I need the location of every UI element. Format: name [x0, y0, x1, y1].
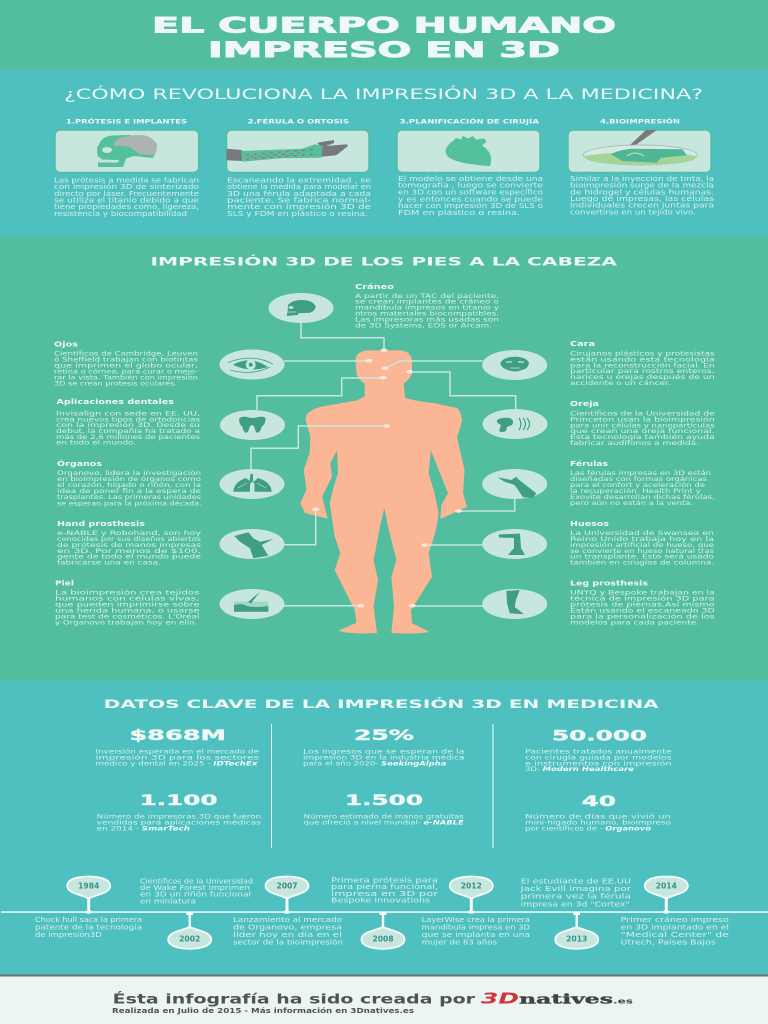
panel: body map	[54, 254, 715, 633]
text: Ojos: rar la vista. También con impresión	[54, 374, 198, 382]
text block: Las prótesis a medida se fabrican	[54, 176, 199, 184]
text: Piel: una herida humana, o usarse	[55, 608, 200, 615]
icon: heart	[446, 136, 491, 166]
timeline text: 2008 prosthesis	[331, 877, 438, 905]
text: Ojos: que imprimen el globo ocular,	[54, 363, 198, 370]
stat: 25%: impresión 3D en la industria médica	[303, 753, 465, 761]
text: Ojos: Ojos	[54, 340, 78, 349]
text: Cráneo: Cráneo	[355, 282, 394, 291]
timeline text: 2007 Organovo: de Organovo, empresa	[233, 924, 342, 932]
text block: mente con impresión 3D de	[227, 203, 371, 211]
card	[55, 130, 199, 172]
background: header band	[0, 0, 768, 70]
stat: 1.100: en 2014 - SmarTech	[97, 825, 191, 832]
logo: 3Dnatives: 3D	[481, 990, 519, 1008]
text: Hand prosthesis: fabricarse una en casa.	[57, 560, 161, 567]
timeline text: 2013 Cortex: primera vez la férula	[521, 892, 631, 900]
text block: bioimpresión surge de la mezcla	[570, 182, 714, 190]
connector: splint	[455, 499, 515, 513]
icon: splint	[482, 469, 547, 499]
timeline text: 2002 Wake Forest: de Wake Forest imprimen	[140, 884, 250, 892]
background: key data panel	[0, 681, 768, 975]
stat: 40: por científicos de - Organovo	[525, 824, 652, 832]
text: Huesos: Huesos	[570, 519, 609, 528]
text: Cara: Cara	[570, 339, 595, 348]
text: Oreja: Científicos de la Universidad de	[570, 409, 715, 417]
text: Leg prosthesis: UNYQ y Bespoke trabajan en la	[570, 590, 715, 597]
text block: SLS y FDM en plástico o resina.	[227, 210, 368, 218]
text: Aplicaciones dentales: más de 2,6 millones de pacientes	[56, 433, 200, 441]
text: Huesos: se convierte en hueso natural tras	[570, 548, 714, 555]
timeline text: 2007 Organovo: líder hoy en día en el	[233, 931, 342, 939]
text: Oreja: fabricar audífonos a medida.	[570, 439, 699, 447]
text: Férulas: Las férulas impresas en 3D están	[570, 469, 711, 477]
text block: paciente. Se fabrica normal-	[227, 196, 372, 204]
panel: key data	[1, 696, 768, 949]
text block: resistencia y biocompatibilidad	[54, 210, 187, 218]
text: Aplicaciones dentales: en todo el mundo.	[56, 440, 136, 447]
text: Leg prosthesis: prótesis de piernas.Así mismo	[570, 601, 715, 609]
text block: convertirse en un tejido vivo.	[570, 208, 696, 216]
pin: 2013	[555, 912, 598, 949]
logo: 3Dnatives: natives	[519, 992, 613, 1008]
stat: 1.500: que ofreció a nivel mundial- e-NABLE	[304, 818, 465, 826]
card	[226, 130, 369, 172]
pin: 2012	[450, 876, 493, 914]
background: revolution panel	[0, 70, 768, 237]
text: Oreja: Oreja	[570, 399, 599, 408]
text: Leg prosthesis	[570, 579, 715, 626]
pin: 2013: 2013	[566, 935, 587, 944]
human body silhouette	[301, 351, 467, 633]
timeline text: 2007 Organovo: sector de la bioimpresión	[233, 938, 343, 946]
text: Leg prosthesis: modelos para cada paciente.	[570, 619, 699, 626]
text: Cara: están usando ésta tecnología	[570, 355, 715, 363]
text: Ojos: 3D se crean protesis oculares.	[54, 381, 177, 388]
column heading: 1.PRÓTESIS E IMPLANTES	[66, 116, 188, 126]
timeline text: 2002 Wake Forest	[140, 877, 253, 905]
text: Aplicaciones dentales: debut, la compañía ha tratado a	[56, 427, 200, 435]
timeline text: 2002 Wake Forest: Científicos de la Universidad	[140, 877, 253, 885]
stat: 40: mini-hígado humano, bioimpreso	[525, 818, 671, 826]
text: Cráneo	[355, 282, 499, 329]
text block: Luego de impresas, las células	[570, 195, 714, 203]
stat: 40: Número de días que vivió un	[525, 813, 671, 821]
text: Oreja: Princeton usan la bioimpresión	[570, 415, 715, 423]
stat: 50.000	[525, 729, 672, 773]
text: Aplicaciones dentales: con la impresión 3D. Desde su	[56, 421, 200, 429]
text: Huesos	[570, 519, 714, 567]
text: Hand prosthesis: conocidas por sus diseños abiertos	[57, 536, 201, 543]
text: Órganos: Órganos	[57, 459, 102, 468]
text: Cráneo: otros materiales biocompatibles.	[355, 311, 499, 318]
text: Cara: particular para rostros enteros,	[570, 368, 715, 375]
text block: en 3D con un software específico	[398, 188, 543, 196]
heading: revolution: ¿CÓMO REVOLUCIONA LA IMPRESIÓN 3D A LA MEDICINA?	[64, 85, 703, 103]
connector: lungs	[251, 424, 390, 469]
text: Hand prosthesis: en 3D. Por menos de $100,	[57, 548, 201, 555]
connector: tooth	[257, 376, 387, 410]
timeline text: 2008 prosthesis: Bespoke Innovations	[331, 897, 430, 905]
text: Huesos: un transplante. Esto será usado	[570, 553, 714, 561]
stat: 1.100	[97, 793, 261, 832]
timeline text: 2008 prosthesis: para pierna funcional,	[331, 883, 438, 891]
text block	[54, 176, 199, 218]
text: Aplicaciones dentales: crea nuevos tipos de ortodoncias	[56, 416, 200, 423]
stat: 1.100: Número de impresoras 3D que fueron	[97, 813, 261, 821]
text block: con impresión 3D de sinterizado	[54, 183, 199, 191]
column divider	[271, 724, 272, 848]
text: Hand prosthesis	[57, 519, 202, 567]
pin: 2002: 2002	[179, 935, 200, 944]
panel: revolution	[54, 85, 714, 218]
background: footer band	[0, 975, 768, 1024]
stat: $868M: médico y dental en 2025 - IDTechEx	[96, 759, 259, 767]
column 4: bioprinting	[568, 116, 714, 216]
text: Huesos: Reino Unido trabaja hoy en la	[570, 536, 714, 543]
icon: ear with sound waves	[482, 409, 548, 439]
text: Órganos: Organovo, lidera la investigación	[57, 469, 201, 477]
connector: eye	[284, 359, 373, 363]
icon: tooth	[220, 410, 285, 440]
text: Leg prosthesis: para la personalización de los	[570, 612, 715, 620]
timeline text: 2014 skull: "Medical Center" de	[621, 931, 729, 939]
timeline axis	[1, 911, 768, 913]
text: Ojos: retina o córnea, para curar o mejo-	[54, 368, 198, 376]
column 2: splint	[226, 116, 372, 218]
stat: 50.000: con cirugía guiada por modelos	[525, 753, 672, 761]
timeline text: 2013 Cortex: Jack Evill imagina por	[519, 885, 631, 893]
icon: eye	[220, 350, 284, 380]
text: Órganos: idea de poner fin a la espera de	[57, 488, 201, 495]
text: Cráneo: A partir de un TAC del paciente,	[355, 293, 499, 300]
timeline text: 2013 Cortex	[519, 877, 631, 908]
stat: 1.500: Número estimado de manos gratuitas	[304, 813, 464, 821]
column heading: 3.PLANIFICACIÓN DE CIRUJÍA	[400, 116, 539, 126]
stat: 1.100: vendidas para aplicaciones médicas	[97, 818, 261, 826]
text: Férulas: Férulas	[570, 459, 608, 468]
text block: directo por láser. Frecuentemente	[54, 190, 199, 198]
column divider	[492, 724, 494, 848]
card	[568, 130, 711, 172]
text block: individuales crecen juntas para	[570, 202, 714, 210]
text: Leg prosthesis: Leg prosthesis	[570, 579, 648, 588]
pin: 2007: 2007	[276, 882, 298, 891]
text: Cara	[570, 339, 715, 387]
timeline text: 2007 Organovo	[233, 916, 343, 946]
text block: y es entonces cuando se puede	[398, 196, 543, 204]
pin: 2002	[168, 912, 211, 949]
timeline text: 2014 skull: Utrech, Paises Bajos	[621, 938, 716, 946]
stat: $868M: impresión 3D para los sectores	[96, 753, 259, 761]
connector: ear	[406, 370, 516, 409]
timeline text: 2002 Wake Forest: en 3D un riñón funcional	[140, 891, 251, 899]
stat: 25%: 25%	[354, 728, 415, 744]
text: Piel: Piel	[55, 579, 74, 588]
text block: de hidrogel y células humanas.	[570, 188, 714, 196]
text block: hacer con impresión 3D de SLS o	[398, 202, 543, 210]
icon: leg prosthesis	[482, 589, 547, 619]
stat: $868M: $868M	[129, 728, 226, 744]
stat: $868M: Inversión esperada en el mercado de	[96, 747, 259, 755]
text: Hand prosthesis: de prótesis de manos impresas	[57, 541, 201, 549]
icon: prosthetic hand	[220, 529, 284, 559]
credit line: Ésta infografía ha sido creada por	[113, 990, 475, 1007]
text: Aplicaciones dentales: Aplicaciones dentales	[56, 397, 174, 406]
background: body panel	[0, 237, 768, 681]
text block: El modelo se obtiene desde una	[398, 175, 543, 183]
pin: 1984: 1984	[78, 882, 99, 891]
pin: 2012: 2012	[461, 882, 482, 891]
timeline text: 2008 prosthesis: Primera prótesis para	[331, 877, 438, 885]
text block: FDM en plástico o resina.	[398, 209, 520, 217]
footer note: Realizada en Julio de 2015 - Más información en 3Dnatives.es	[112, 1007, 414, 1015]
text: Cara: Cirujanos plásticos y protesistas	[570, 349, 715, 357]
stat: 1.500: 1.500	[345, 793, 423, 809]
footer rule	[0, 974, 768, 976]
timeline text: 2013 Cortex: impresa en 3d "Cortex"	[521, 900, 630, 908]
stat: 25%: Los ingresos que se esperan de la	[303, 748, 465, 755]
text: Ojos	[54, 340, 198, 388]
text: Piel: para test de cosméticos. L'Oréal	[55, 612, 200, 620]
stat: 50.000: 3D- Modern Healthcare	[525, 765, 634, 773]
text: Huesos: también en cirugías de columna.	[570, 559, 714, 567]
logo: 3Dnatives: .es	[613, 998, 633, 1006]
text: Aplicaciones dentales: Invisalign con sede en EE. UU,	[56, 410, 200, 417]
logo: 3Dnatives	[481, 990, 633, 1008]
icon: skull implant	[97, 135, 157, 167]
text: Férulas: pero aún no están a la venta.	[570, 499, 693, 507]
heading: key data: DATOS CLAVE DE LA IMPRESIÓN 3D EN MEDICINA	[104, 696, 659, 711]
text: Férulas: la recuperación. Health Print y	[570, 487, 701, 495]
text: Cráneo: de 3D Systems, EOS or Arcam.	[355, 322, 492, 329]
timeline text: 2014 skull: en 3D implantado en el	[621, 924, 729, 932]
text block: tiene propiedades como, ligereza,	[54, 203, 199, 211]
connector: skull	[301, 323, 388, 352]
stat: 40: 40	[582, 794, 616, 810]
text: Hand prosthesis: gente de todo el mundo puede	[57, 554, 201, 561]
text: Cráneo: mandíbula impresos en titanio y	[355, 304, 499, 312]
stat: 25%	[303, 728, 465, 767]
text: Órganos: se esperan para la próxima década.	[57, 500, 202, 508]
footer	[0, 974, 768, 1015]
text block	[570, 175, 714, 216]
text: Piel: que pueden imprimirse sobre	[55, 602, 200, 609]
timeline text: 2012 LayerWise	[422, 916, 530, 946]
stat: $868M	[96, 728, 259, 767]
pin: 1984	[67, 876, 110, 914]
text: Cráneo: se crean implantes de cráneo o	[355, 298, 499, 306]
stat: 50.000: e instrumentos con impresión	[525, 759, 672, 767]
timeline text: 2012 LayerWise: LayerWise crea la primera	[422, 916, 530, 924]
text: Huesos: impresión artificial de hueso, que	[570, 541, 714, 549]
column 3: surgery planning	[397, 116, 543, 217]
timeline text: 2014 skull	[621, 916, 729, 946]
text: Piel	[55, 579, 200, 626]
card	[397, 130, 540, 172]
text: Férulas: Exovite desarrollan dichas férulas,	[570, 493, 715, 501]
timeline	[1, 876, 768, 949]
connector: face	[382, 361, 483, 370]
stat: 25%: para el año 2020- SeekingAlpha	[303, 760, 446, 767]
text: Oreja	[570, 399, 715, 447]
icon: arm with splint	[226, 140, 348, 162]
text: Órganos: el corazón, hígado o riñón, con la	[57, 481, 201, 489]
text: Huesos: La Universidad de Swansea en	[570, 530, 714, 537]
timeline text: 2012 LayerWise: mandíbula impresa en 3D	[422, 924, 530, 932]
pin: 2008	[362, 912, 404, 949]
timeline text: 2008 prosthesis: impresa en 3D por	[331, 890, 438, 898]
title: IMPRESO EN 3D	[208, 38, 560, 62]
column 1: prosthesis	[54, 116, 199, 218]
text: Leg prosthesis: Están usando el escaneado 3D	[570, 607, 715, 615]
pin: 2014: 2014	[656, 882, 677, 891]
connector: hand	[284, 508, 319, 545]
title: EL CUERPO HUMANO	[152, 14, 616, 38]
text: Cara: accidente o un cáncer.	[570, 379, 671, 387]
text block	[227, 176, 372, 218]
text block: Escaneando la extremidad , se	[227, 176, 371, 184]
stat: 1.500	[304, 793, 465, 826]
pin: 2007	[266, 876, 308, 914]
text: Cráneo: Las impresoras más usadas son	[355, 315, 499, 323]
stat: 50.000: Pacientes tratados anualmente	[525, 748, 672, 755]
pin: 2014	[645, 876, 688, 914]
icon: skull	[268, 293, 334, 323]
timeline text: 2013 Cortex: El estudiante de EE.UU	[521, 877, 631, 885]
timeline text: 1984 Chuck Hull: Chuck hull saca la primera	[35, 916, 142, 924]
icon: skin	[220, 589, 284, 619]
icon: lungs	[220, 469, 284, 499]
text: Férulas: para el confort y aceleración de	[570, 481, 705, 489]
text: Aplicaciones dentales	[56, 397, 200, 447]
text: Oreja: para unir células y nanopartículas	[570, 421, 715, 429]
timeline text: 2014 skull: Primer cráneo impreso	[621, 916, 729, 924]
text: Piel: humanos con células vivas,	[55, 595, 200, 603]
icon: petri dish and needle	[583, 130, 697, 165]
title	[152, 14, 616, 62]
text: Cara: para la reconstrucción facial. En	[570, 361, 715, 369]
text: Férulas	[570, 459, 715, 507]
text: Hand prosthesis: e-NABLE y Robohand, son hoy	[57, 530, 202, 537]
text: Órganos	[57, 459, 202, 508]
connector: bone	[422, 543, 483, 547]
text block: 3D una férula adaptada a cada	[227, 190, 371, 198]
text: Férulas: diseñadas con formas orgánicas	[570, 475, 707, 483]
text: Hand prosthesis: Hand prosthesis	[57, 519, 145, 528]
timeline text: 2012 LayerWise: que se implanta en una	[422, 931, 530, 939]
text block	[398, 175, 543, 217]
timeline text: 1984 Chuck Hull: patente de la tecnología	[35, 924, 142, 932]
pin: 2008: 2008	[372, 935, 394, 944]
timeline text: 2002 Wake Forest: en miniatura	[140, 897, 196, 905]
column heading: 4.BIOIMPRESIÓN	[600, 116, 680, 126]
text: Ojos: ó Sheffield trabajan con biotintas	[54, 356, 198, 364]
text: Órganos: trasplantes. Las primeras unidades	[57, 494, 201, 501]
text: Leg prosthesis: técnica de impresión 3D para	[570, 595, 715, 603]
text: Piel: La bioimpresión crea tejidos	[55, 589, 200, 597]
text: Piel: y Organovo trabajan hoy en ello.	[55, 619, 197, 626]
connector: leg	[409, 604, 483, 608]
text block: obtiene la medida para modelar en	[227, 183, 371, 191]
stat: 50.000: 50.000	[552, 729, 647, 745]
timeline text: 2012 LayerWise: mujer de 83 años	[422, 938, 497, 946]
timeline text: 1984 Chuck Hull: de impresión3D	[35, 931, 102, 939]
text: Órganos: en bioimpresión de órganos como	[57, 475, 201, 483]
stat: 1.100: 1.100	[140, 793, 218, 809]
text: Cara: narices u orejas después de un	[570, 373, 715, 381]
text: Ojos: Científicos de Cambridge, Leuven	[54, 350, 198, 358]
timeline text: 2007 Organovo: Lanzamiento al mercado	[233, 916, 342, 924]
text block: tomografía , luego se convierte	[398, 182, 543, 190]
text: Oreja: que crean una oreja funcional.	[570, 428, 715, 435]
heading: body map: IMPRESIÓN 3D DE LOS PIES A LA CABEZA	[150, 254, 617, 268]
text block: Similar a la inyección de tinta, la	[570, 175, 714, 183]
timeline text: 1984 Chuck Hull	[35, 916, 142, 939]
icon: face	[482, 350, 547, 380]
stat: 40	[525, 794, 671, 832]
connector: skin	[284, 604, 364, 608]
icon: bone	[482, 529, 547, 559]
text: Oreja: Esta tecnología también ayuda	[570, 433, 715, 441]
column heading: 2.FÉRULA O ORTOSIS	[248, 116, 350, 126]
text block: se utiliza el titanio debido a que	[54, 196, 199, 204]
